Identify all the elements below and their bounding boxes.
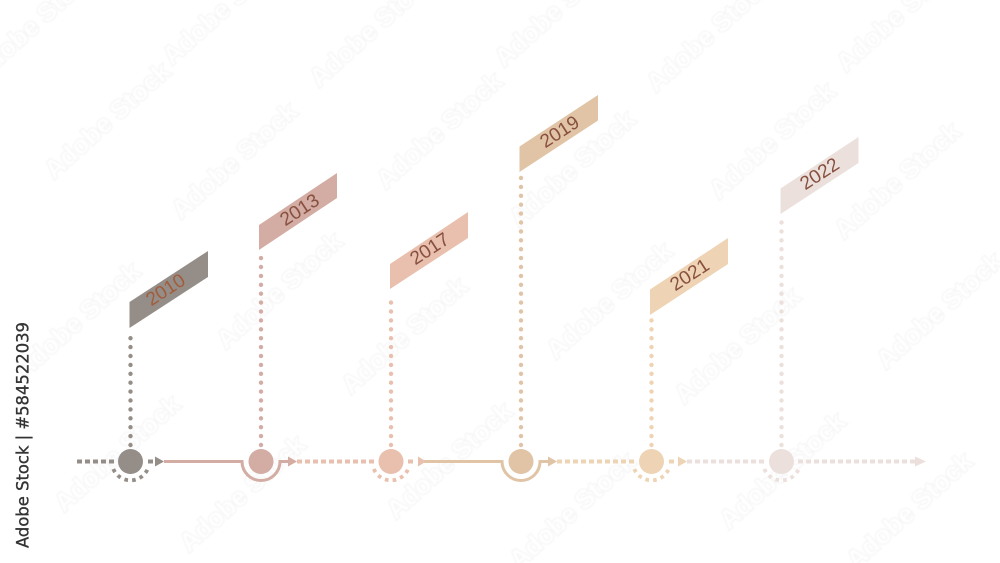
flag 2010 [130, 251, 208, 328]
flag 2013 [259, 173, 337, 250]
dotted stem 2019 [519, 175, 523, 445]
dotted stem 2021 [649, 320, 654, 445]
node 2022 [769, 449, 794, 474]
watermark pattern: Adobe Stock [713, 406, 851, 535]
label 2010: 2010 [143, 270, 189, 311]
watermark pattern: Adobe Stock [173, 429, 311, 558]
milestone 2013 [164, 173, 337, 480]
arrowhead 2021 [678, 456, 687, 466]
dashed axis 2021 [557, 460, 674, 464]
arrowhead 2013 [288, 456, 297, 466]
arrowhead 2019 [548, 456, 557, 466]
milestone 2021 [557, 238, 728, 480]
milestone 2010 [77, 251, 208, 480]
milestone 2019 [424, 95, 598, 480]
milestone 2022 [687, 137, 926, 480]
node 2010 [118, 449, 143, 474]
flag 2022 [780, 137, 858, 214]
dotted arc 2017 [374, 469, 408, 480]
arrowhead 2017 [418, 456, 426, 466]
dotted arc 2010 [113, 469, 148, 480]
watermark pattern: Adobe Stock [380, 396, 518, 525]
node 2019 [508, 449, 534, 474]
dotted arc 2021 [634, 469, 669, 480]
dashed axis 2017 [297, 460, 416, 464]
dotted stem 2013 [259, 256, 263, 445]
watermark pattern: Adobe Stock [828, 116, 966, 245]
milestone 2017 [297, 212, 468, 480]
flag 2019 [520, 95, 598, 172]
dotted stem 2010 [128, 335, 133, 445]
dotted arc 2022 [764, 469, 799, 480]
watermark pattern: Adobe Stock [668, 281, 806, 410]
dashed axis 2022 [687, 460, 915, 464]
watermark pattern: Adobe Stock [503, 104, 641, 233]
stock credit text: Adobe Stock | #584522039 [14, 322, 34, 548]
label 2019: 2019 [537, 112, 583, 153]
label 2021: 2021 [667, 255, 713, 296]
dotted stem 2022 [779, 218, 784, 445]
watermark pattern: Adobe Stock [38, 56, 176, 185]
label 2022: 2022 [797, 154, 843, 195]
watermark pattern: Adobe Stock [165, 96, 303, 225]
flag 2017 [390, 212, 468, 289]
dashed axis 2010 [77, 460, 153, 464]
node 2013 [248, 449, 274, 474]
watermark pattern: Adobe Stock [540, 236, 678, 365]
watermark pattern: Adobe Stock [370, 66, 508, 195]
label 2017: 2017 [407, 229, 453, 270]
connector 2013 [164, 462, 289, 480]
node 2017 [378, 449, 404, 474]
watermark pattern: Adobe Stock [703, 76, 841, 205]
flag 2021 [650, 238, 728, 315]
watermark pattern: Adobe Stock [335, 271, 473, 400]
arrowhead 2022 [915, 456, 926, 466]
dotted stem 2017 [389, 294, 393, 445]
watermark pattern: Adobe Stock [8, 256, 146, 385]
watermark pattern: Adobe Stock [210, 226, 348, 355]
watermark pattern: Adobe Stock [48, 389, 186, 518]
node 2021 [639, 449, 664, 474]
connector 2019 [424, 462, 549, 480]
arrowhead 2010 [155, 456, 164, 466]
label 2013: 2013 [277, 190, 323, 231]
